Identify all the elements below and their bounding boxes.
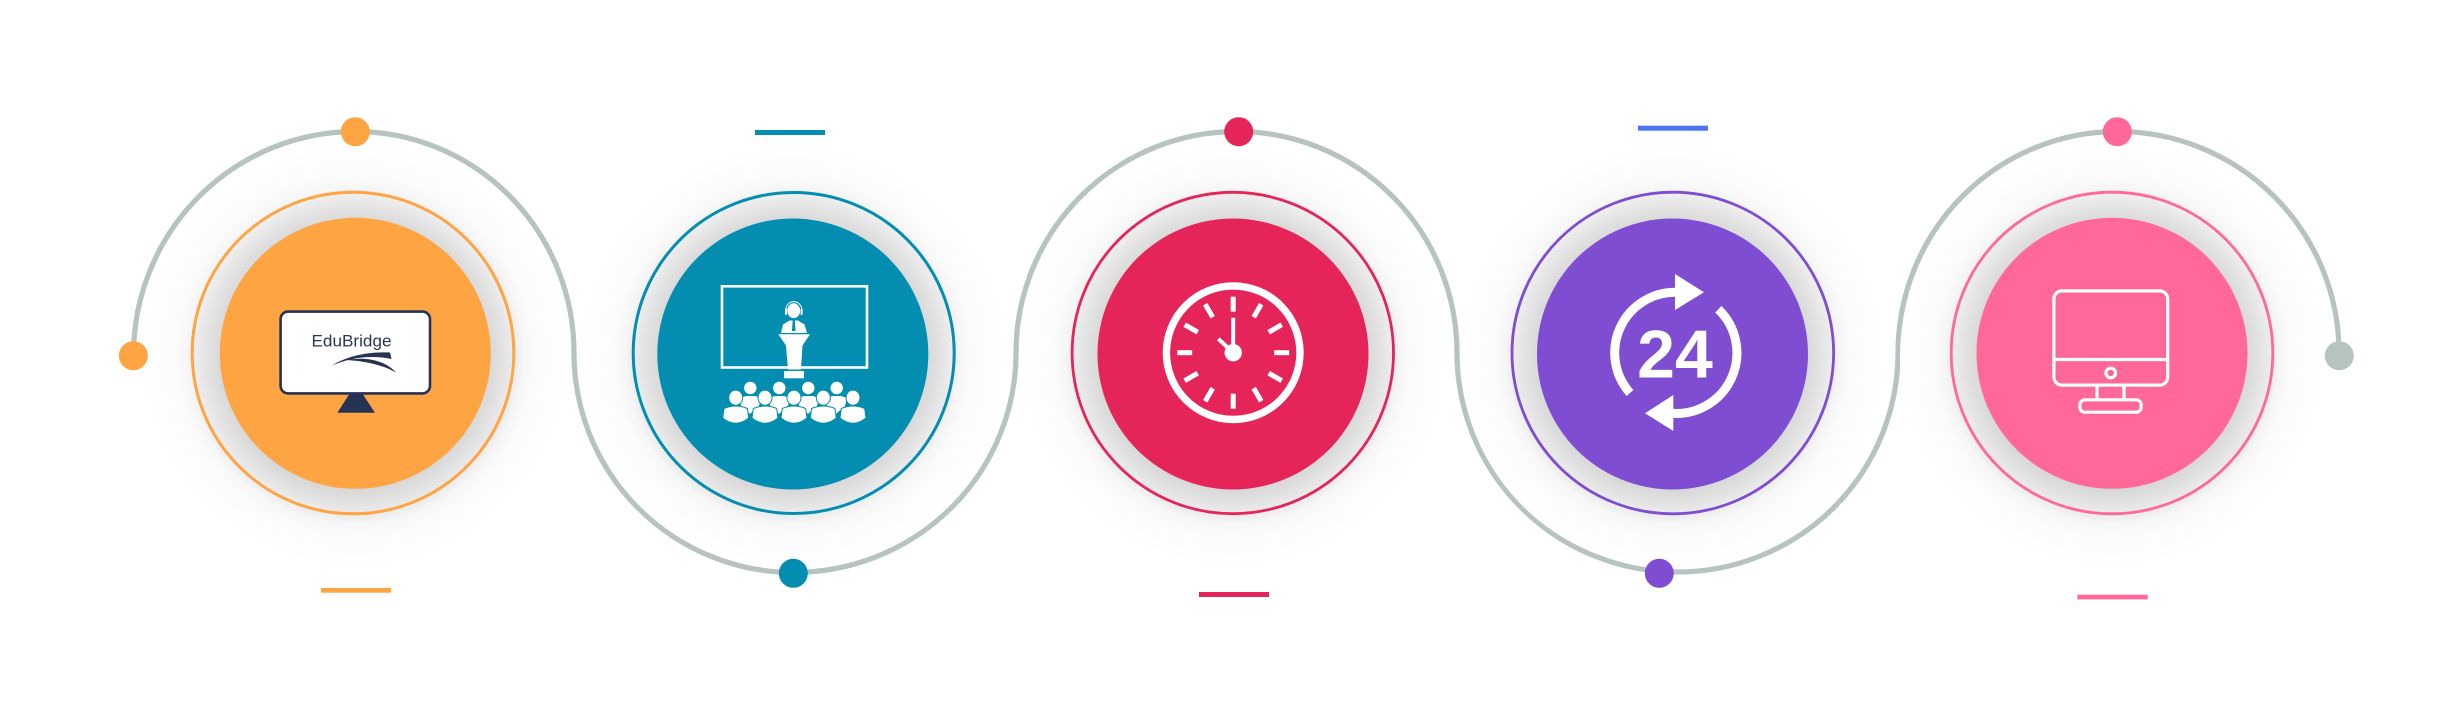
logo wordmark: EduBridge <box>312 332 392 351</box>
monitor stand <box>2097 386 2124 399</box>
clock hands <box>1218 318 1233 353</box>
step 1 dash <box>321 588 391 593</box>
step 3 dash <box>1199 592 1269 597</box>
step 5 marker: top dot <box>2103 117 2132 146</box>
upper-left arc <box>1615 292 1676 393</box>
icon: 24 hour cycle <box>1615 274 1737 431</box>
audience front row <box>723 390 866 423</box>
monitor base <box>2080 400 2141 412</box>
shadow <box>143 144 567 568</box>
step 1: orange panel <box>143 144 567 568</box>
speaker <box>781 302 807 333</box>
monitor screen <box>281 312 430 393</box>
filled disc <box>1976 218 2248 489</box>
icon: EduBridge monitor <box>281 312 430 413</box>
torso <box>781 320 807 333</box>
step 2 marker: bottom dot <box>779 559 808 588</box>
podium base <box>784 371 804 378</box>
podium <box>778 334 810 370</box>
step 2: teal panel <box>581 144 1005 568</box>
clock ticks <box>1177 297 1289 409</box>
headset <box>786 302 802 310</box>
step 5 dash <box>2077 595 2148 599</box>
step 1 marker: top dot <box>341 117 370 146</box>
end marker: grey dot <box>2325 341 2354 370</box>
outer ring <box>1951 192 2273 514</box>
shadow <box>1021 144 1445 568</box>
outer ring <box>1072 192 1394 514</box>
clock hub <box>1224 344 1242 361</box>
outer ring <box>192 192 514 514</box>
filled disc <box>657 218 928 490</box>
connector line <box>134 132 2339 572</box>
step 3: crimson panel <box>1021 144 1445 568</box>
upper arrowhead <box>1675 274 1704 310</box>
step 4 marker: bottom dot <box>1645 559 1674 588</box>
monitor chin divider <box>2054 358 2168 361</box>
outer ring <box>633 192 954 514</box>
step 1 marker: left dot <box>119 341 148 370</box>
filled disc <box>220 218 491 489</box>
step 4 dash <box>1638 126 1708 131</box>
shadow <box>1900 144 2324 568</box>
lower-right arc <box>1672 309 1737 413</box>
shadow <box>581 144 1005 568</box>
icon: speaker and audience <box>722 286 867 423</box>
audience back row <box>740 382 847 414</box>
projection screen <box>722 286 867 368</box>
monitor stand <box>337 393 375 413</box>
step 5: pink panel <box>1900 144 2324 568</box>
step 4: purple panel <box>1460 144 1884 568</box>
outer ring <box>1512 192 1834 514</box>
power button <box>2106 368 2116 378</box>
filled disc <box>1098 218 1368 490</box>
shadow <box>1460 144 1884 568</box>
clock face <box>1166 286 1300 420</box>
filled disc <box>1537 218 1808 490</box>
icon: clock <box>1166 286 1300 420</box>
lower arrowhead <box>1645 395 1673 431</box>
step 3 marker: top dot <box>1224 117 1253 146</box>
monitor body <box>2054 291 2168 385</box>
tie <box>792 320 796 331</box>
logo swoosh <box>332 352 396 372</box>
icon: desktop monitor <box>2054 291 2168 412</box>
step 2 dash <box>755 130 825 135</box>
head <box>787 303 800 318</box>
number 24: 24 <box>1637 317 1713 393</box>
